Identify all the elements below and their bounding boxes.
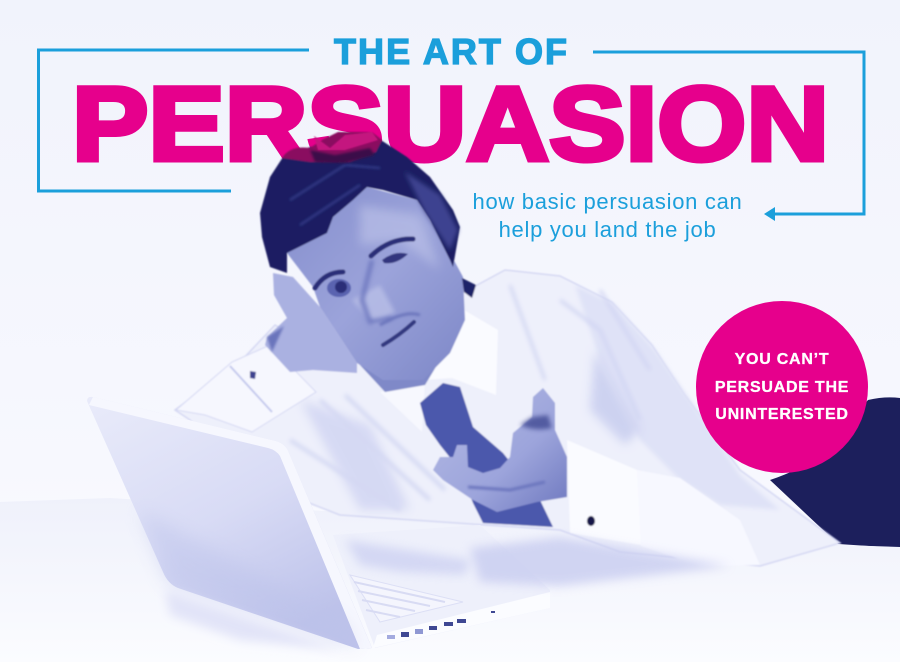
right cuff — [567, 440, 641, 545]
badge: you can't persuade the uninterested — [696, 301, 868, 473]
subtitle — [473, 189, 742, 242]
badge: you can't persuade the uninterested: YOU CAN’T — [735, 351, 829, 368]
laptop — [87, 397, 550, 649]
ear shadow — [462, 278, 476, 298]
near eyebrow — [315, 272, 343, 288]
badge: you can't persuade the uninterested: PERSUADE THE — [715, 379, 849, 396]
collar — [423, 310, 498, 395]
subtitle: help you land the job — [499, 217, 716, 242]
badge: you can't persuade the uninterested: UNINTERESTED — [715, 406, 849, 423]
laptop lid — [87, 397, 372, 649]
hair tinted by title — [282, 132, 382, 162]
table shadow — [470, 537, 730, 586]
far eyebrow — [371, 239, 413, 256]
heading: the art of: THE ART OF — [334, 31, 567, 72]
arrow — [764, 207, 775, 221]
laptop reflection — [165, 590, 340, 650]
cufflink left — [250, 371, 256, 379]
nose shadow — [362, 260, 392, 322]
title frame — [38, 50, 864, 214]
right sleeve — [637, 470, 760, 566]
head hand — [265, 273, 357, 373]
neck — [360, 360, 440, 392]
cufflink right — [587, 516, 595, 526]
raised hand — [433, 388, 567, 512]
subtitle: how basic persuasion can — [473, 189, 742, 214]
keyboard — [350, 575, 463, 622]
keyboard rows — [354, 582, 445, 617]
shirt cuff left — [176, 345, 316, 432]
laptop deck — [333, 525, 550, 648]
heading: persuasion: PERSUASION — [72, 66, 829, 183]
deck shadow — [345, 540, 470, 575]
near eye — [327, 279, 351, 297]
table — [0, 498, 900, 662]
chair — [770, 397, 900, 548]
mouth — [383, 322, 414, 345]
ports — [387, 611, 495, 639]
far eye — [382, 253, 408, 263]
man — [175, 132, 840, 566]
shirt — [175, 270, 840, 566]
face — [287, 187, 465, 380]
hair — [260, 133, 460, 273]
tie — [420, 383, 553, 527]
laptop front edge — [373, 592, 550, 648]
